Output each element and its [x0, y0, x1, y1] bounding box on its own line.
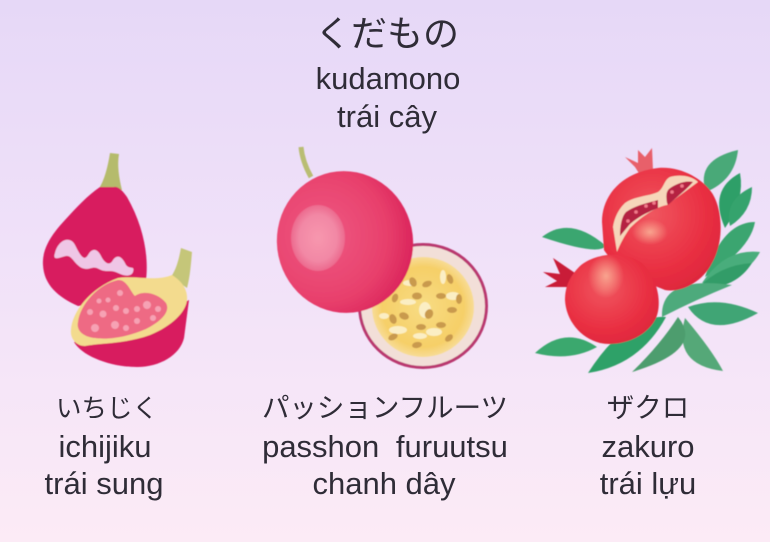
seeds [387, 273, 462, 349]
highlight [291, 205, 345, 271]
title: Japanese: くだもの [315, 13, 459, 54]
whole fig [43, 153, 147, 306]
fig romaji: ichijiku [58, 429, 152, 464]
fig highlight [54, 240, 133, 276]
pulp [379, 270, 460, 339]
opening [613, 176, 698, 252]
title: romaji: kudamono [316, 61, 460, 96]
fig Vietnamese: trái sung [45, 466, 163, 501]
illustration: pomegranates [535, 148, 760, 373]
title: Vietnamese: trái cây [337, 99, 437, 134]
pomegranate Vietnamese: trái lựu [600, 466, 696, 501]
label: passion fruit [262, 392, 508, 501]
whole passion fruit [264, 158, 426, 326]
passion fruit Vietnamese: chanh dây [312, 466, 456, 501]
label: pomegranate [600, 392, 696, 501]
illustration: passion fruit [264, 147, 488, 369]
label: fig [45, 395, 163, 501]
cut passion fruit [358, 243, 488, 369]
stem [301, 147, 311, 177]
small pomegranate [543, 254, 659, 344]
passion fruit Japanese: パッションフルーツ [262, 392, 508, 423]
pomegranate romaji: zakuro [601, 429, 695, 464]
fig seeds [87, 290, 161, 332]
pomegranate Japanese: ザクロ [607, 392, 689, 423]
big pomegranate [602, 148, 721, 291]
passion fruit romaji: passhon furuutsu [262, 429, 508, 464]
cut fig [71, 248, 192, 367]
fig Japanese: いちじく [56, 395, 158, 423]
leaves [535, 150, 760, 373]
title block [315, 13, 460, 134]
illustration: figs [43, 153, 192, 367]
